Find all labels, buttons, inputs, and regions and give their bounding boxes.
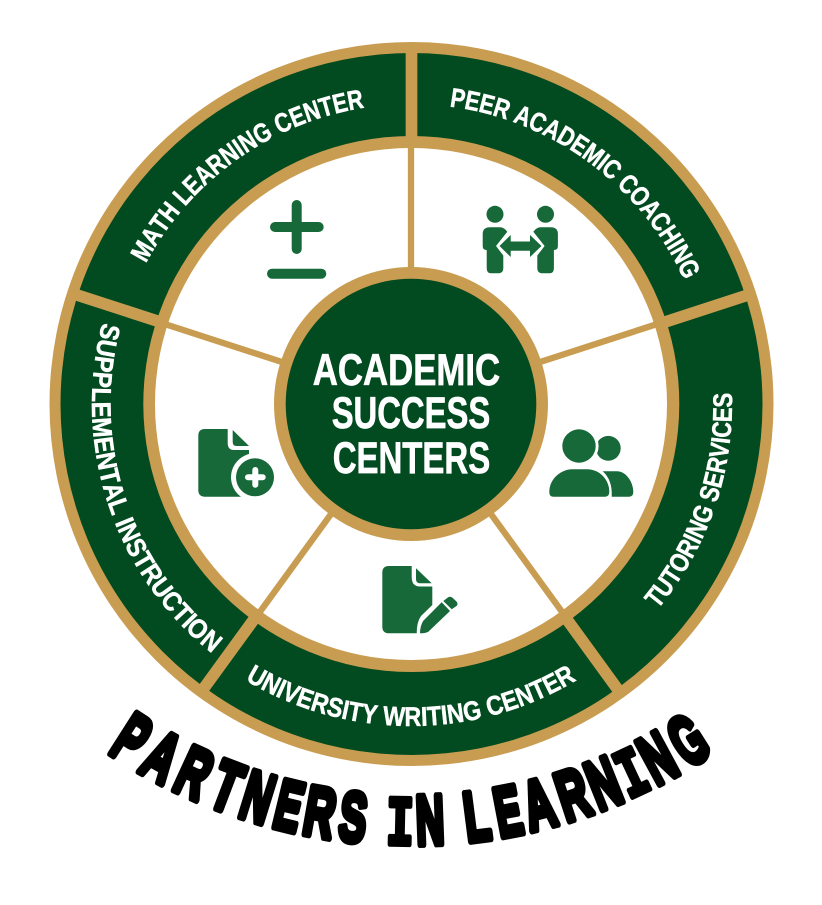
segment label: Tutoring Services: I [678, 530, 708, 548]
segment label: Peer Academic Coaching: M [577, 138, 609, 173]
segment label: Peer Academic Coaching: E [565, 129, 593, 162]
title: Partners in Learning: N [626, 717, 689, 800]
segment label: University Writing Center: T [526, 673, 552, 707]
segment label: Math Learning Center: E [285, 101, 310, 134]
title: Partners in Learning: S [335, 778, 371, 858]
segment label: Supplemental Instruction: S [119, 534, 153, 562]
title: Partners in Learning: N [232, 756, 283, 840]
segment label: Peer Academic Coaching: D [552, 121, 580, 154]
title: Partners in Learning: R [547, 754, 600, 837]
segment label: Supplemental Instruction: N [112, 519, 146, 547]
segment label: University Writing Center: W [382, 701, 406, 733]
segment label: University Writing Center: I [339, 695, 352, 726]
segment label: Supplemental Instruction: T [93, 466, 125, 487]
icon: document with plus [198, 429, 279, 501]
segment label: Supplemental Instruction: U [89, 337, 122, 359]
segment label: Supplemental Instruction: A [96, 479, 130, 504]
segment label: Tutoring Services: R [671, 535, 705, 563]
segment label: Peer Academic Coaching: O [622, 180, 656, 213]
segment label: Supplemental Instruction: E [86, 401, 115, 418]
segment label: Tutoring Services: E [698, 469, 731, 491]
segment label: University Writing Center: T [426, 701, 443, 732]
title: Partners in Learning: L [459, 777, 495, 857]
outer ring [50, 42, 774, 766]
segment label: Peer Academic Coaching: N [664, 240, 697, 268]
segment label: University Writing Center: E [538, 667, 565, 701]
segment label: Tutoring Services [640, 393, 739, 614]
title: Partners in Learning: A [515, 764, 564, 847]
title: Partners in Learning: G [655, 700, 722, 782]
center hub [274, 267, 548, 541]
segment label: Peer Academic Coaching: E [462, 86, 482, 118]
icon: two people with double arrow [483, 206, 558, 273]
segment label: University Writing Center: E [293, 682, 317, 716]
segment label: University Writing Center: U [242, 660, 271, 694]
title: Partners in Learning: I [385, 786, 415, 866]
segment label: Peer Academic Coaching: A [538, 113, 566, 147]
segment label: University Writing Center: V [278, 677, 304, 710]
segment label: Supplemental Instruction: S [93, 321, 125, 343]
segment label: Peer Academic Coaching: I [591, 149, 614, 176]
segment label: University Writing Center: N [511, 679, 538, 713]
segment label: Math Learning Center: H [153, 197, 186, 228]
segment label: Supplemental Instruction [86, 321, 227, 658]
title: Partners in Learning: E [267, 766, 311, 848]
segment label: Peer Academic Coaching: G [671, 255, 705, 283]
segment label: University Writing Center: I [439, 700, 449, 731]
segment label: Peer Academic Coaching: C [612, 169, 644, 201]
hub text: SUCCESS [332, 389, 490, 438]
segment label: Peer Academic Coaching: C [643, 207, 677, 237]
segment label: Tutoring Services: C [707, 420, 738, 439]
segment label: Peer Academic Coaching: C [596, 153, 627, 186]
segment label: Supplemental Instruction: E [87, 435, 119, 455]
segment label: Math Learning Center: E [330, 88, 351, 120]
title: Partners in Learning: E [488, 772, 529, 853]
segment label: Tutoring Services: R [702, 454, 734, 476]
segment label: University Writing Center: S [324, 692, 346, 725]
segment label: Supplemental Instruction: P [87, 354, 119, 374]
segment label: Peer Academic Coaching: E [476, 89, 498, 121]
segment label: Math Learning Center: T [145, 210, 176, 238]
segment label: Peer Academic Coaching [448, 84, 705, 283]
segment label: Peer Academic Coaching: C [524, 106, 551, 140]
segment label: Peer Academic Coaching: H [652, 221, 686, 250]
segment label: University Writing Center: T [346, 696, 366, 729]
title: Partners in Learning: T [200, 746, 253, 828]
segment label: Math Learning Center: C [270, 107, 297, 140]
segment label: Math Learning Center: N [300, 95, 324, 129]
segment label: Supplemental Instruction: T [166, 598, 198, 629]
title: Partners in Learning: P [99, 699, 164, 780]
segment label: Supplemental Instruction: N [90, 450, 122, 472]
segment label: Tutoring Services: O [663, 548, 697, 578]
segment label: University Writing Center: I [420, 702, 428, 732]
segment label: University Writing Center: E [498, 685, 522, 718]
title: Partners in Learning: A [130, 716, 193, 799]
segment label: Tutoring Services: T [640, 585, 671, 614]
segment label: University Writing Center: R [404, 702, 421, 732]
segment label: University Writing Center: C [483, 689, 507, 723]
segment label: Math Learning Center: A [135, 222, 169, 251]
icon: plus-minus [267, 200, 326, 279]
segment label: Peer Academic Coaching: I [661, 234, 689, 255]
title: Partners in Learning: R [298, 773, 342, 854]
segment label: University Writing Center: Y [360, 699, 379, 731]
segment label: Tutoring Services: S [694, 483, 727, 505]
segment label: University Writing Center: R [551, 660, 580, 694]
segment label: Tutoring Services: S [709, 393, 739, 408]
wheel diagram [50, 42, 774, 766]
segment label: Math Learning Center: R [201, 148, 232, 181]
segment label: Supplemental Instruction: I [176, 608, 202, 634]
segment label: Tutoring Services: U [648, 572, 681, 603]
segment label: Math Learning Center: T [316, 91, 337, 124]
segment label: Math Learning Center: A [189, 159, 220, 192]
segment label: Peer Academic Coaching: P [448, 84, 467, 115]
title: Partners in Learning [99, 699, 722, 866]
segment label: University Writing Center: N [445, 698, 466, 730]
segment label: University Writing Center [242, 660, 580, 733]
segment label: University Writing Center: N [257, 667, 285, 702]
segment label: Tutoring Services: I [707, 436, 737, 445]
segment label: Peer Academic Coaching: A [634, 194, 667, 225]
title: Partners in Learning: N [576, 742, 632, 826]
hub text: ACADEMIC [313, 346, 500, 395]
segment label: Tutoring Services: N [681, 516, 714, 543]
segment label: Supplemental Instruction: N [195, 625, 227, 658]
segment label: University Writing Center: R [308, 687, 332, 721]
segment label: Supplemental Instruction: L [86, 387, 116, 403]
segment label: Peer Academic Coaching: R [490, 93, 514, 126]
segment label: Supplemental Instruction: T [127, 547, 160, 575]
segment label: Math Learning Center: E [177, 170, 209, 202]
segment label: Math Learning Center [126, 84, 366, 268]
segment label: Math Learning Center: L [168, 181, 199, 211]
segment label: Math Learning Center: M [126, 236, 160, 267]
segment label: Math Learning Center: R [345, 85, 366, 117]
segment label: Math Learning Center: N [233, 126, 263, 159]
segment label: Math Learning Center: I [228, 134, 249, 162]
segment label: Supplemental Instruction: P [86, 371, 117, 389]
segment label: Math Learning Center: G [248, 117, 277, 151]
segment label: Tutoring Services: G [687, 501, 721, 528]
segment label: Tutoring Services: V [705, 441, 736, 460]
segment label: Tutoring Services: T [656, 562, 688, 590]
hub text [313, 346, 500, 483]
segment label: University Writing Center: G [460, 695, 484, 728]
title: Partners in Learning: R [164, 732, 224, 816]
title: Partners in Learning: I [604, 735, 663, 818]
segment label: Peer Academic Coaching: A [510, 100, 536, 133]
segment label: Supplemental Instruction: M [86, 416, 117, 439]
segment label: Supplemental Instruction: U [144, 572, 178, 604]
segment label: Supplemental Instruction: R [134, 559, 168, 590]
segment label: Supplemental Instruction: O [180, 612, 214, 646]
segment label: Supplemental Instruction: C [155, 586, 188, 618]
segment label: Supplemental Instruction: I [109, 514, 139, 531]
segment label: Math Learning Center: N [214, 138, 245, 172]
segment label: Tutoring Services: E [709, 407, 739, 423]
segment label: Supplemental Instruction: L [101, 495, 134, 518]
title: Partners in Learning: N [414, 782, 446, 861]
segment label: University Writing Center: I [272, 674, 290, 704]
icon: people group [549, 426, 633, 497]
icon: document with pen [382, 566, 458, 633]
hub text: CENTERS [333, 434, 490, 483]
